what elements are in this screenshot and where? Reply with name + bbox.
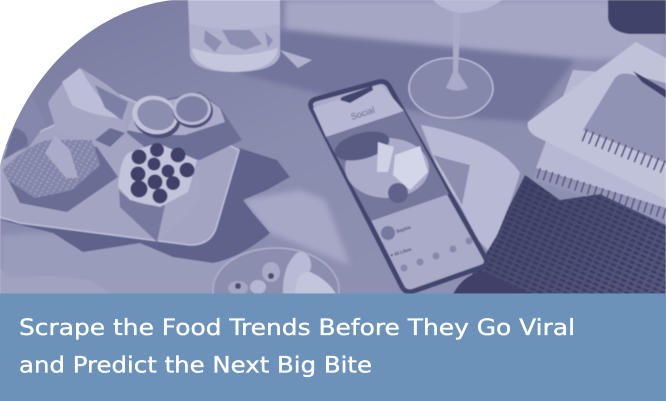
glass tumbler (188, 0, 312, 72)
hand (421, 125, 520, 250)
table surface (0, 0, 666, 296)
bottom-left toast (0, 268, 112, 294)
phone like count: ♥ 43 Likes (390, 246, 412, 258)
toast: figs (127, 91, 242, 160)
lower notebook (533, 70, 666, 222)
toast: ham (3, 68, 128, 160)
plate shadow (0, 148, 290, 263)
toast: salami (3, 135, 118, 212)
phone profile name (381, 224, 412, 240)
table light and shadow bands (0, 0, 666, 296)
phone profile name: Sophie (396, 224, 412, 234)
phone heading: Social (350, 105, 376, 122)
rounded white corner (0, 0, 172, 165)
coaster (608, 0, 666, 34)
wine glass (409, 0, 502, 118)
board (0, 95, 239, 245)
phone nav icons (400, 238, 472, 272)
bowl with olives (213, 248, 339, 332)
phone photo of food (326, 111, 449, 221)
title line 2: and Predict the Next Big Bite (19, 354, 372, 378)
toast: blueberries (118, 143, 200, 242)
phone (311, 82, 486, 292)
title banner (0, 294, 666, 401)
upper notebook stack (528, 42, 666, 200)
title line 1: Scrape the Food Trends Before They Go Viral (19, 316, 575, 341)
knitted sleeve (453, 175, 666, 294)
